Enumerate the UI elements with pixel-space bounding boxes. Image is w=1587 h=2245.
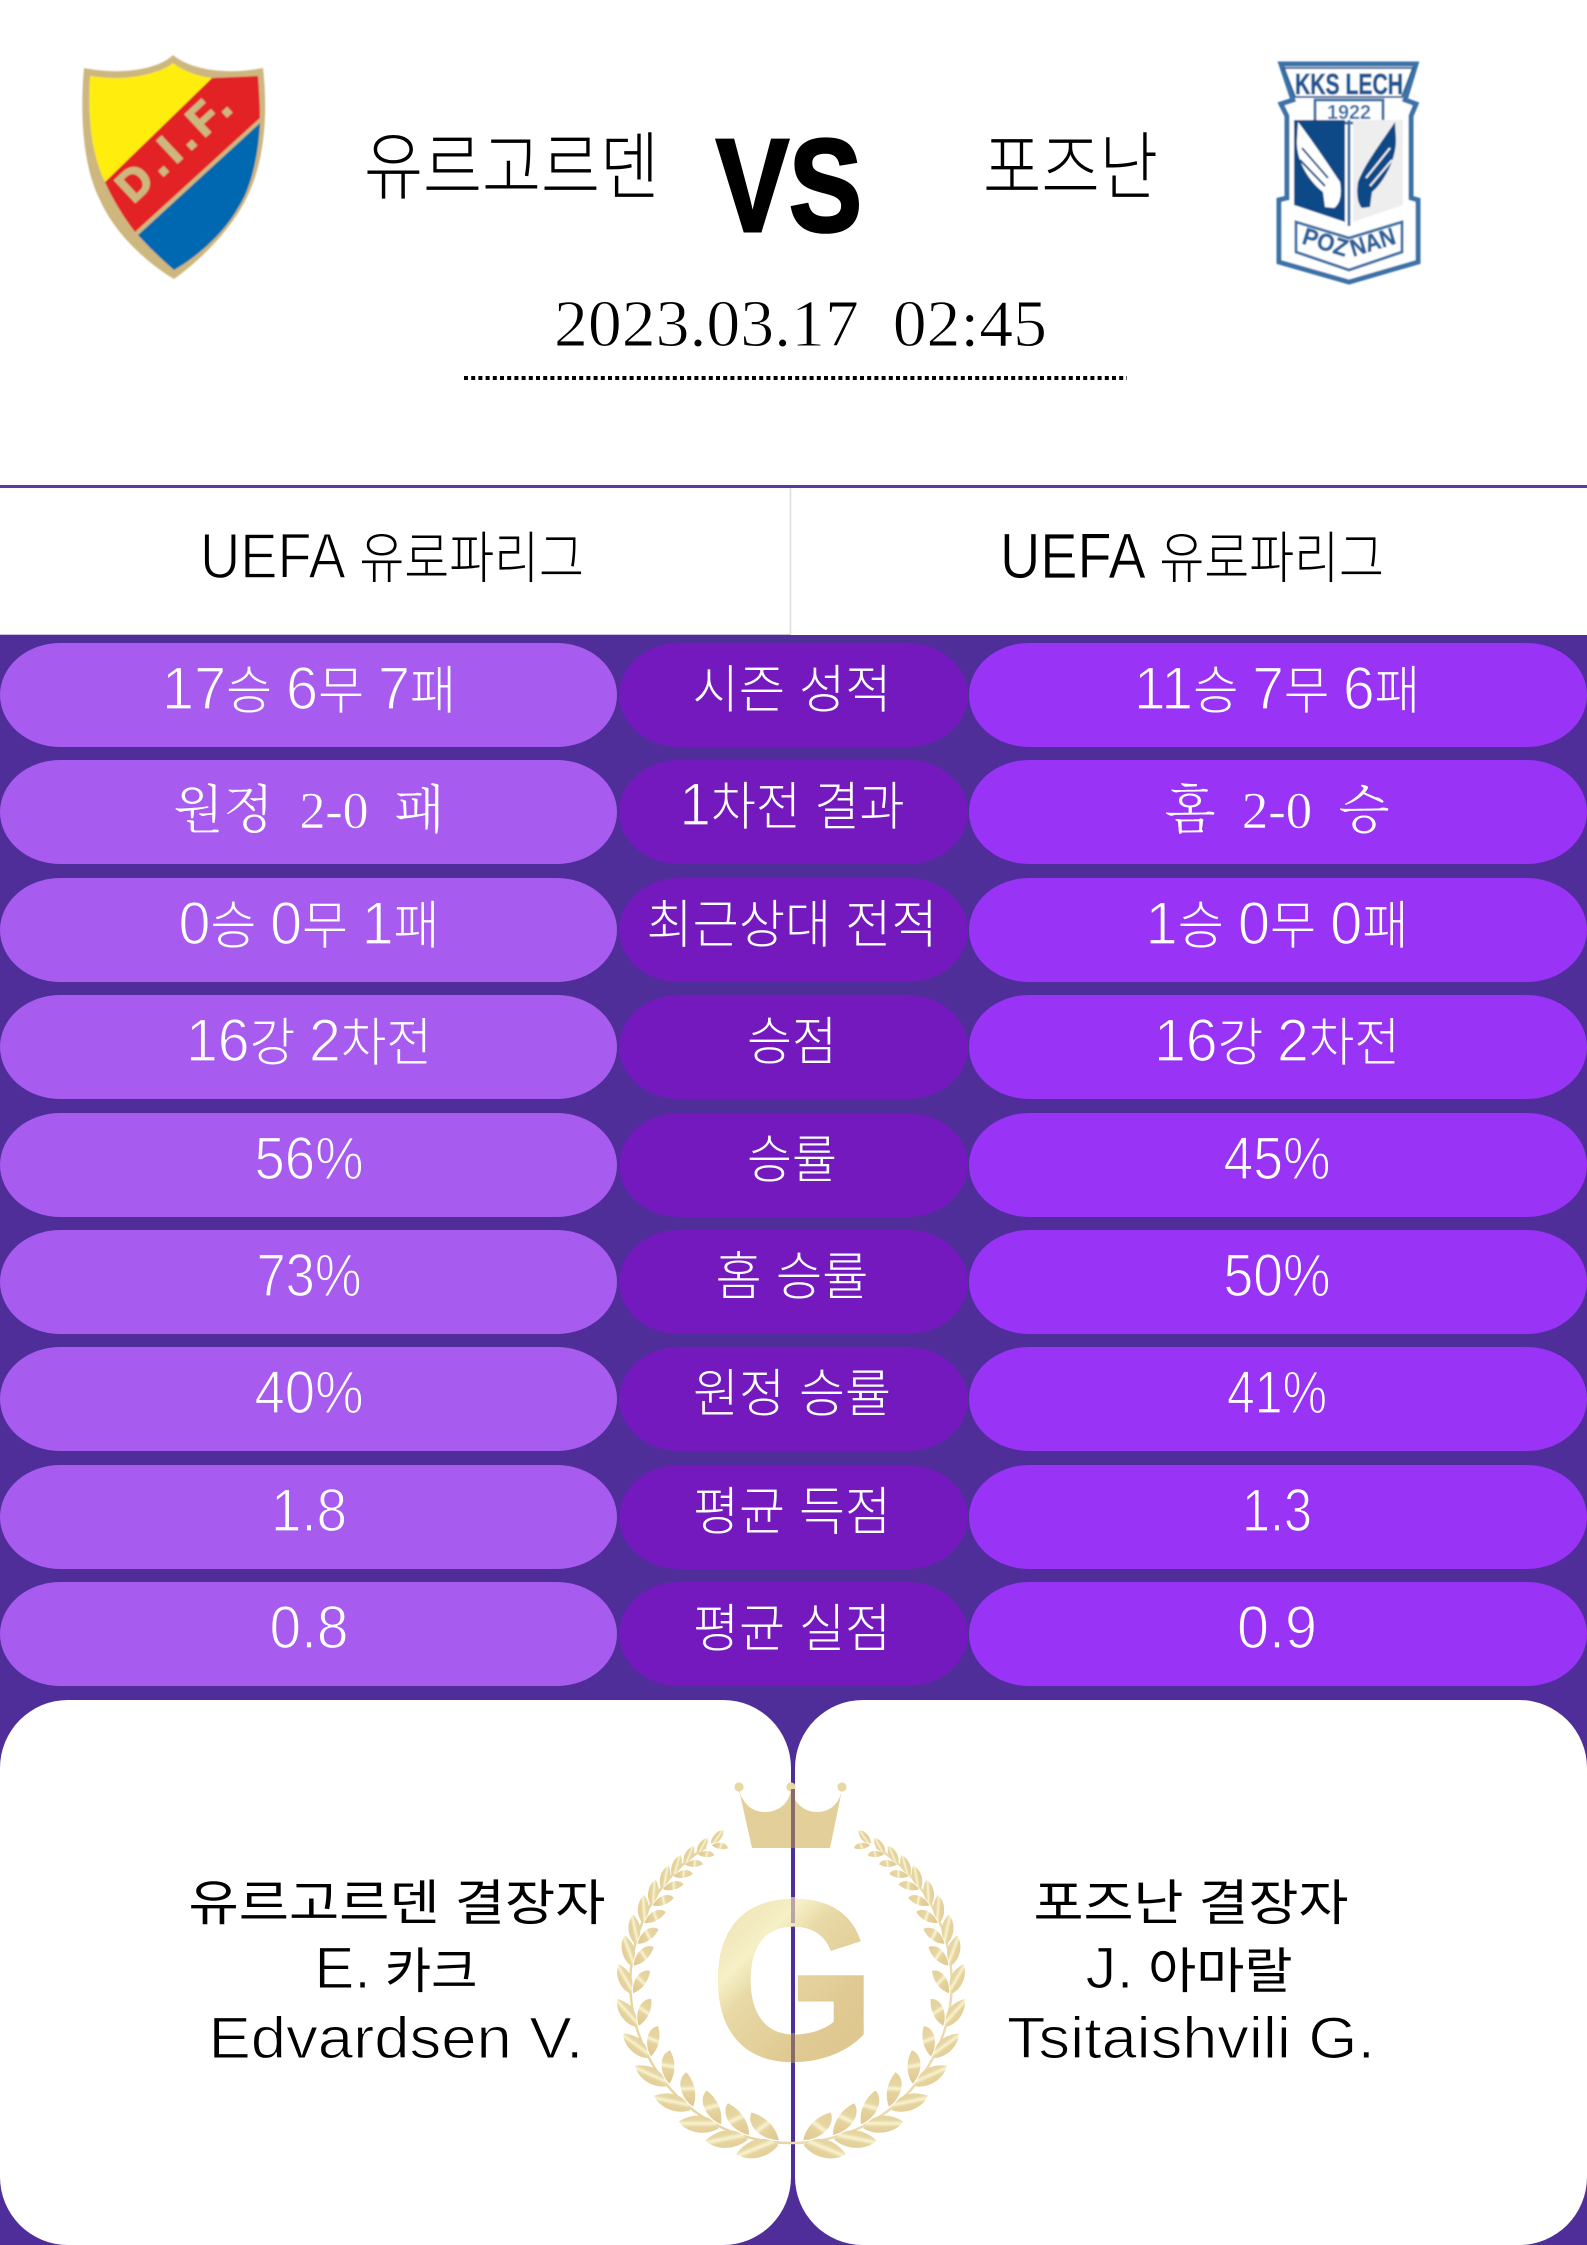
match date and time: 2023.03.17 02:45 bbox=[554, 287, 1047, 361]
icon: Lech Poznan crest: POZ bbox=[1299, 223, 1351, 262]
team name: Poznan: 포즈난 bbox=[983, 126, 1158, 209]
panel: away absentees: 포즈난 결장자 bbox=[1034, 1877, 1348, 1931]
logo: gold crown and laurel G bbox=[615, 1782, 967, 2160]
row: season record: 시즌 성적 bbox=[692, 662, 892, 720]
row: season record: 17승 6무 7패 bbox=[162, 655, 456, 722]
row: first leg result: 홈 2-0 승 bbox=[1164, 782, 1390, 840]
row: recent head to head: 1승 0무 0패 bbox=[1146, 890, 1408, 957]
stats table bbox=[0, 643, 1587, 1686]
icon: Lech Poznan crest: KKS LECH bbox=[1295, 69, 1403, 101]
row: win rate: 45% bbox=[1224, 1125, 1330, 1192]
row: season record bbox=[0, 643, 1587, 747]
panel: away absentees bbox=[795, 1700, 1587, 2245]
VS mark: VS bbox=[716, 112, 862, 259]
panel: home absentees bbox=[0, 1700, 791, 2245]
row: recent head to head: 0승 0무 1패 bbox=[178, 890, 440, 957]
competition header row bbox=[0, 486, 1587, 635]
dotted underline bbox=[464, 376, 1127, 380]
row: home win rate bbox=[0, 1230, 1587, 1334]
team name: Djurgarden: 유르고르덴 bbox=[364, 126, 659, 209]
row: first leg result: 원정 2-0 패 bbox=[174, 782, 444, 840]
row: points: 16강 2차전 bbox=[186, 1007, 432, 1074]
row: points bbox=[0, 995, 1587, 1099]
row: average goals for: 1.3 bbox=[1242, 1477, 1312, 1544]
row: points: 16강 2차전 bbox=[1154, 1007, 1400, 1074]
row: average goals for: 1.8 bbox=[271, 1477, 347, 1544]
icon: Lech Poznan crest bbox=[1279, 64, 1418, 282]
row: average goals for: 평균 득점 bbox=[693, 1484, 891, 1542]
row: home win rate: 홈 승률 bbox=[716, 1249, 868, 1307]
row: away win rate bbox=[0, 1347, 1587, 1451]
row: average goals for bbox=[0, 1465, 1587, 1569]
panel: away absentees: J. 아마랄 bbox=[1086, 1936, 1292, 2001]
divider overlay across logo bbox=[791, 1789, 795, 2063]
row: first leg result: 1차전 결과 bbox=[680, 771, 904, 838]
row: recent head to head: 최근상대 전적 bbox=[646, 897, 938, 955]
icon: Lech Poznan crest: NAN bbox=[1347, 223, 1399, 262]
competition: home: UEFA 유로파리그 bbox=[200, 520, 584, 592]
row: win rate: 56% bbox=[254, 1125, 364, 1192]
row: win rate bbox=[0, 1113, 1587, 1217]
header panel bbox=[0, 0, 1587, 486]
row: recent head to head bbox=[0, 878, 1587, 982]
row: away win rate: 원정 승률 bbox=[693, 1366, 891, 1424]
letter G: G bbox=[710, 1854, 876, 2108]
laurel wreath bbox=[615, 1829, 967, 2160]
panel: away absentees: Tsitaishvili G. bbox=[1007, 2006, 1375, 2071]
row: home win rate: 50% bbox=[1224, 1242, 1330, 1309]
row: away win rate: 41% bbox=[1227, 1359, 1327, 1426]
row: average goals against: 평균 실점 bbox=[693, 1601, 891, 1659]
icon: Lech Poznan crest: 1922 bbox=[1327, 102, 1371, 124]
row: average goals against bbox=[0, 1582, 1587, 1686]
row: season record: 11승 7무 6패 bbox=[1134, 655, 1420, 722]
row: average goals against: 0.8 bbox=[270, 1594, 348, 1661]
icon: Djurgarden crest bbox=[82, 55, 265, 279]
row: average goals against: 0.9 bbox=[1237, 1594, 1317, 1661]
panel: home absentees: E. 카크 bbox=[314, 1936, 478, 2001]
row: first leg result bbox=[0, 760, 1587, 864]
row: home win rate: 73% bbox=[256, 1242, 362, 1309]
icon: Djurgarden crest: D.I.F. bbox=[106, 77, 246, 212]
panel: home absentees: 유르고르덴 결장자 bbox=[188, 1877, 606, 1931]
crown bbox=[734, 1782, 847, 1848]
row: points: 승점 bbox=[747, 1014, 837, 1072]
row: away win rate: 40% bbox=[254, 1359, 364, 1426]
panel: home absentees: Edvardsen V. bbox=[208, 2006, 584, 2071]
competition: away: UEFA 유로파리그 bbox=[1000, 520, 1384, 592]
row: win rate: 승률 bbox=[747, 1132, 837, 1190]
